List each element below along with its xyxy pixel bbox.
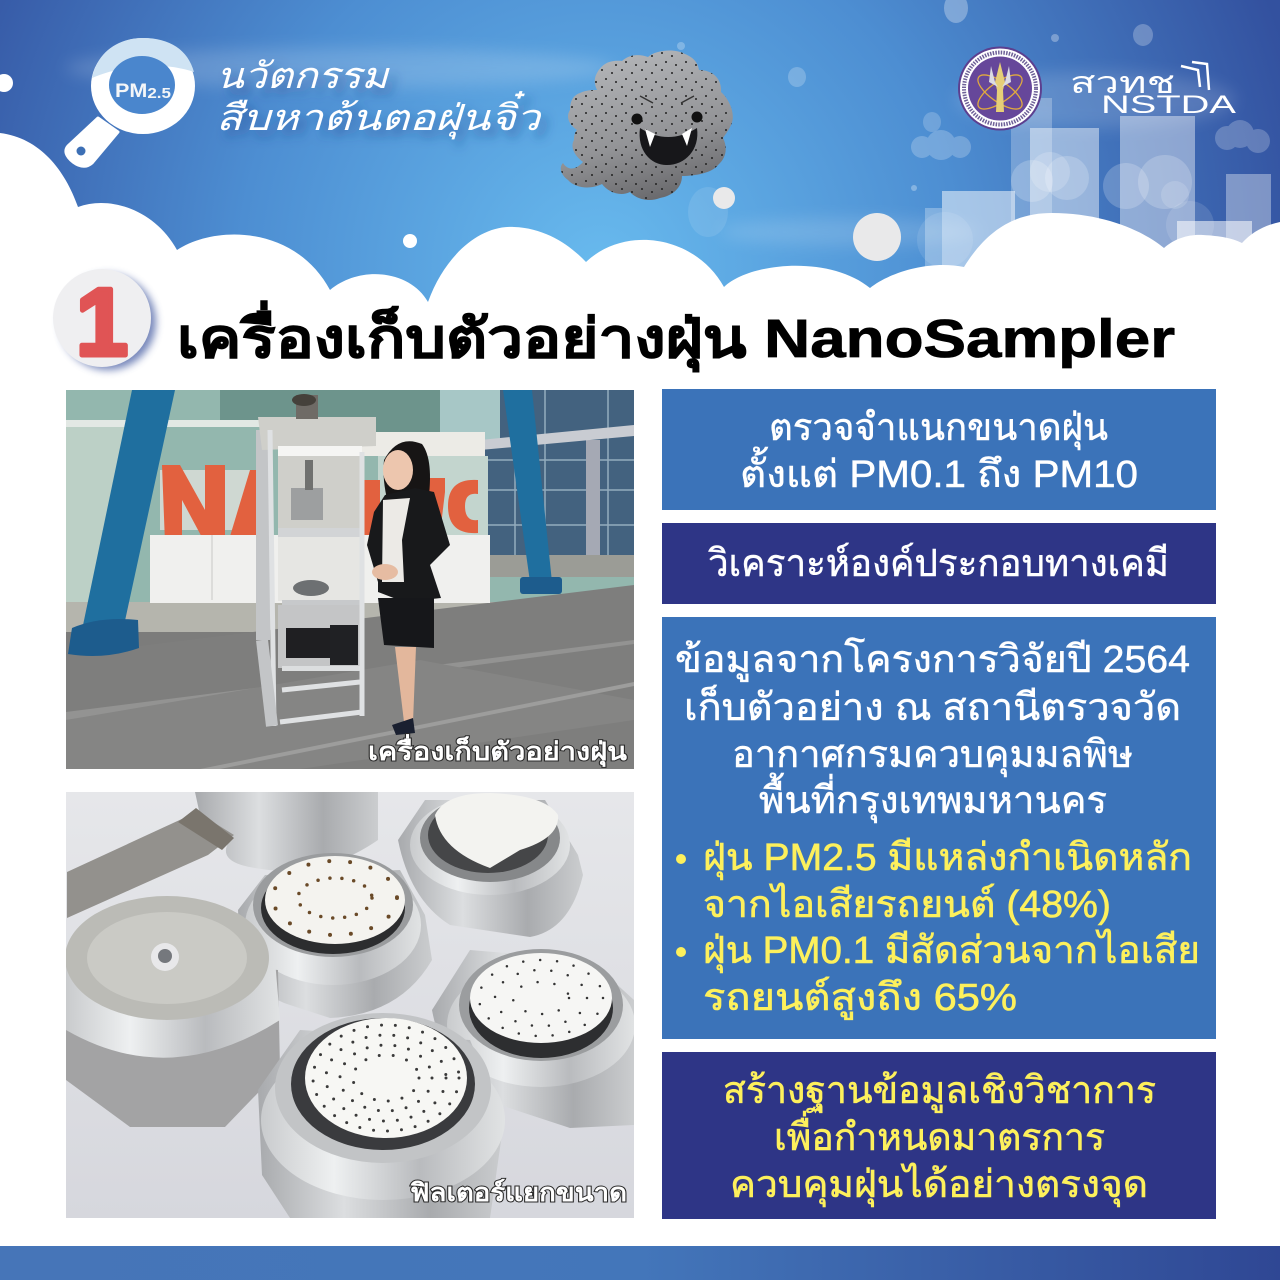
bullet: PM2.5: จากไอเสียรถยนต์ (48%) [703, 883, 1111, 926]
bullet: PM0.1: รถยนต์สูงถึง 65% [703, 976, 1017, 1020]
panel: academic database: เพื่อกำหนดมาตรการ [774, 1111, 1105, 1159]
NSTDA logo [1070, 62, 1237, 119]
campaign title: นวัตกรรม [216, 55, 391, 96]
panel: size classification: ตั้งแต่ PM0.1 ถึง PM10 [740, 446, 1138, 496]
pillars [82, 390, 175, 630]
panel: research data: ข้อมูลจากโครงการวิจัยปี 2564 [675, 637, 1190, 682]
panel: size classification: ตรวจจำแนกขนาดฝุ่น [769, 407, 1108, 450]
small cloud right [1215, 120, 1270, 153]
sky haze and floating particles [0, 0, 1235, 261]
NSTDA logo: NSTDA [1101, 91, 1237, 119]
sampler top right [398, 793, 583, 937]
NSTDA logo: สวทช [1070, 67, 1175, 100]
bullet: PM2.5: ฝุ่น PM2.5 มีแหล่งกำเนิดหลัก [703, 837, 1192, 880]
photo: NanoSampler with researcher [66, 390, 634, 769]
panel: size classification [662, 389, 1216, 510]
footer bar [0, 1246, 1280, 1280]
sampler front [258, 1013, 505, 1218]
caption: เครื่องเก็บตัวอย่างฝุ่น [368, 734, 627, 768]
researcher [384, 441, 430, 495]
small background clouds [911, 130, 971, 160]
top cylinder [195, 792, 378, 871]
photo: size-separating filters [65, 792, 635, 1218]
panel: academic database: สร้างฐานข้อมูลเชิงวิชาการ [723, 1070, 1156, 1113]
NANOTEC sign [162, 465, 478, 535]
city skyline [917, 98, 1271, 291]
bullet: PM2.5 [676, 837, 1192, 926]
panel: research data [662, 617, 1216, 1039]
campaign title: สืบหาต้นตอฝุ่นจิ๋ว [216, 91, 542, 140]
bullet: PM0.1 [676, 929, 1200, 1020]
panel: chemical analysis [662, 523, 1216, 604]
PM2.5 label: 2.5 [147, 85, 171, 102]
dust monster mascot [561, 50, 733, 200]
number badge [53, 269, 156, 376]
magnifying glass icon [66, 38, 195, 166]
campaign title [216, 55, 542, 140]
panel: academic database [662, 1052, 1216, 1219]
panel: academic database: ควบคุมฝุ่นได้อย่างตรงจุด [730, 1163, 1148, 1207]
ministry logo [958, 46, 1042, 130]
caption: ฟิลเตอร์แยกขนาด [410, 1178, 627, 1207]
number badge: 1 [76, 269, 128, 376]
sky background [0, 0, 1280, 330]
panel: chemical analysis: วิเคราะห์องค์ประกอบทางเคมี [708, 542, 1169, 585]
PM2.5 label: PM [115, 81, 143, 102]
panel: research data: เก็บตัวอย่าง ณ สถานีตรวจวัด [684, 684, 1181, 729]
panel: research data: พื้นที่กรุงเทพมหานคร [759, 772, 1107, 823]
sampler middle [238, 853, 432, 1018]
closed cylinder [65, 896, 280, 1127]
sampler right [432, 949, 635, 1128]
bullet: PM0.1: ฝุ่น PM0.1 มีสัดส่วนจากไอเสีย [703, 929, 1200, 973]
main heading: เครื่องเก็บตัวอย่างฝุ่น NanoSampler [177, 300, 1175, 373]
sampler cabinet [256, 430, 270, 640]
panel: research data: อากาศกรมควบคุมมลพิษ [732, 734, 1133, 777]
